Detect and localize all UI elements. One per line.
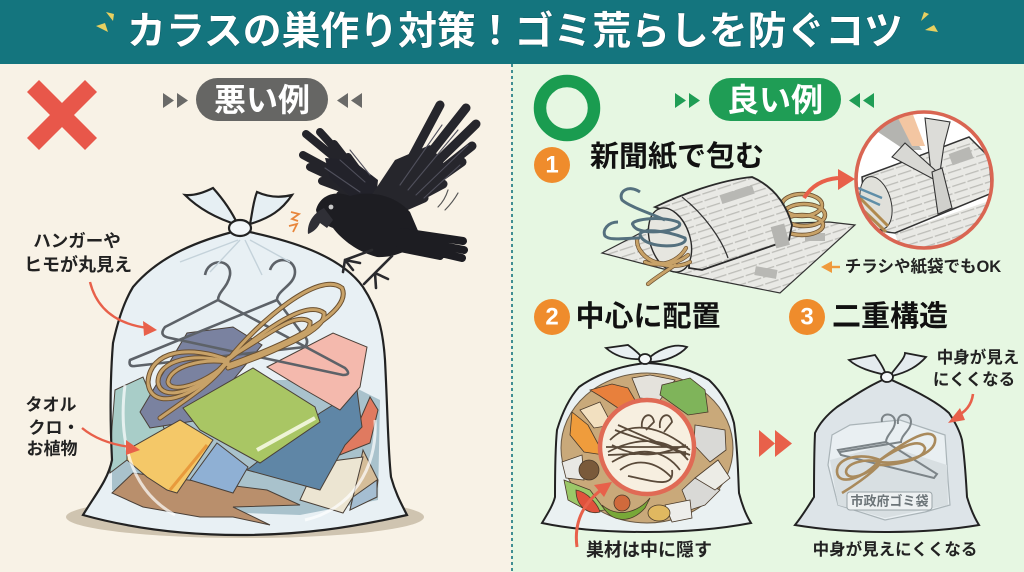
rope	[148, 284, 343, 418]
heading: bad example: 悪い例	[214, 82, 310, 118]
title banner	[0, 0, 1024, 64]
icon: green circle	[540, 81, 594, 135]
tail	[400, 232, 464, 258]
step 1 heading	[534, 140, 764, 183]
rope	[837, 434, 935, 493]
panel: bad example	[24, 78, 476, 538]
callout: hanger and rope visible	[24, 231, 157, 336]
callout: towels and cloth: お植物	[26, 440, 78, 458]
food scraps	[562, 375, 730, 522]
illustration: newspaper wrapped bundle	[602, 177, 855, 293]
bag tie	[185, 188, 292, 236]
beak	[308, 208, 333, 234]
hanger	[838, 414, 937, 478]
arrow: double chevron	[759, 430, 792, 457]
garbage bag with contents	[66, 188, 424, 538]
rope coil behind	[781, 194, 825, 235]
icon: title sparks left	[96, 12, 114, 32]
heading: good example: 良い例	[727, 82, 823, 118]
roll opening contents	[860, 176, 893, 230]
illustration: bag with food scraps	[542, 345, 751, 532]
step 2 heading	[534, 299, 721, 335]
title: カラスの巣作り対策！ゴミ荒らしを防ぐコツ	[127, 10, 903, 54]
step 3 heading: 二重構造	[832, 300, 948, 333]
inset: tied newspaper	[855, 112, 995, 250]
bag tie	[606, 345, 687, 364]
focus circle with nest material	[600, 400, 694, 494]
feather highlights	[325, 125, 468, 198]
callout: towels and cloth	[26, 396, 140, 458]
callout: hanger and rope visible: ハンガーや	[33, 231, 121, 251]
heading: good example	[675, 78, 874, 121]
callout: towels and cloth: タオル	[26, 396, 76, 414]
caption: contents hard to see: 中身が見えにくくなる	[813, 539, 977, 559]
callout: contents hard to see: 中身が見え	[937, 347, 1019, 367]
heading: bad example	[163, 78, 362, 121]
roll opening	[641, 202, 699, 278]
step 2 heading: 中心に配置	[575, 300, 721, 333]
callout: hanger and rope visible: ヒモが丸見え	[24, 254, 132, 275]
step 1 heading: 新聞紙で包む	[590, 140, 764, 173]
bag folds	[180, 240, 290, 275]
inner bag	[828, 420, 950, 520]
step 1 heading: 1	[545, 152, 559, 178]
divider	[511, 64, 513, 572]
step 3 heading	[789, 299, 948, 335]
label on inner bag: 市政府ゴミ袋	[850, 494, 929, 508]
arrow to inset	[804, 169, 855, 198]
left wing	[303, 132, 372, 202]
hanger ends	[604, 189, 685, 246]
body	[316, 194, 422, 257]
icon: squawk marks	[289, 212, 299, 232]
step 2 heading: 2	[545, 304, 559, 330]
callout: towels and cloth: クロ・	[28, 418, 80, 438]
hanger	[130, 260, 348, 375]
right wing	[392, 105, 476, 212]
illustration: double bag	[795, 353, 979, 532]
step 3 heading: 3	[800, 304, 814, 330]
panel: good example	[534, 78, 1019, 560]
callout: hide nest material inside: 巣材は中に隠す	[586, 540, 712, 560]
clothes pile	[110, 327, 380, 525]
legs	[343, 250, 392, 288]
rope end	[637, 240, 690, 284]
icon: title sparks right	[921, 12, 938, 32]
note: flyers or paper bags ok: チラシや紙袋でもOK	[845, 257, 1001, 276]
paper tie	[925, 118, 950, 172]
callout: hide nest material inside	[576, 482, 712, 560]
callout: contents hard to see	[933, 347, 1019, 423]
bag tie	[849, 353, 926, 382]
icon: red cross	[33, 86, 91, 144]
motion marks	[438, 190, 458, 210]
crow	[303, 105, 476, 288]
callout: contents hard to see: にくくなる	[933, 370, 1015, 389]
bag outline	[83, 230, 407, 535]
newspaper roll	[655, 177, 792, 270]
